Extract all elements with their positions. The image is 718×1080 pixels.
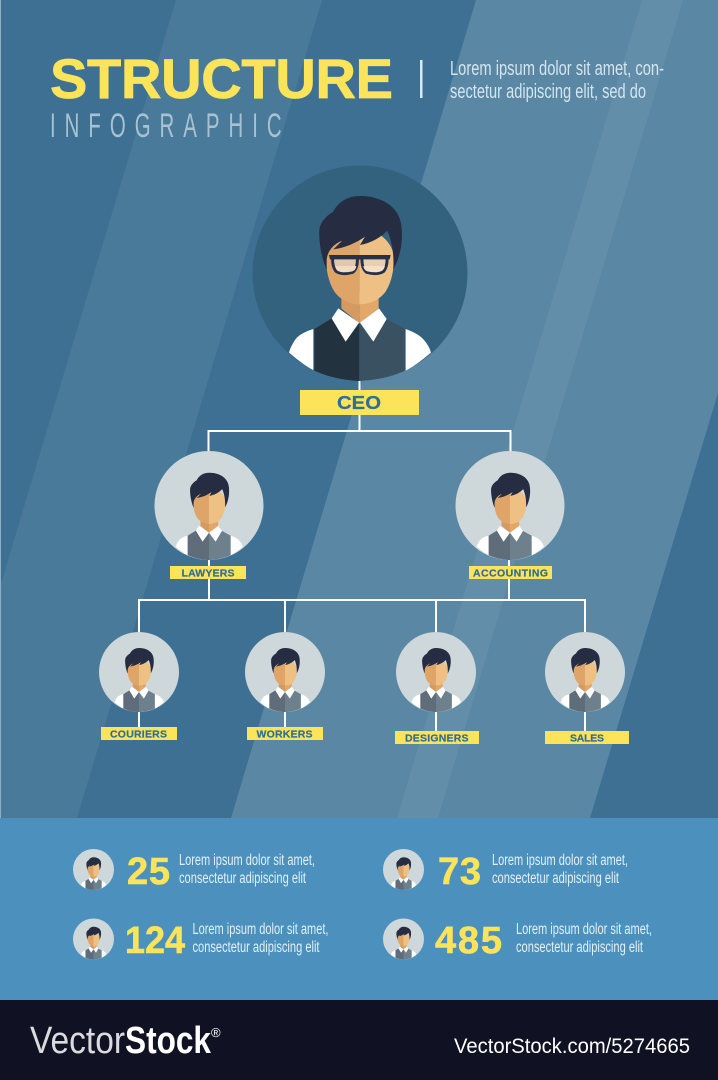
footer bar: [0, 1000, 718, 1080]
panel: statistics: [0, 818, 718, 1000]
label: lawyers: [170, 566, 246, 580]
avatar: sales: [545, 632, 625, 712]
label: lawyers: LAWYERS: [182, 568, 234, 580]
label: sales: SALES: [570, 732, 604, 744]
avatar: couriers: [99, 632, 179, 712]
background panel: [0, 0, 718, 818]
avatar: designers: [396, 632, 476, 712]
label: CEO: [300, 390, 419, 415]
label: workers: WORKERS: [256, 728, 312, 740]
left edge highlight: [0, 0, 1, 1000]
light beam right: [231, 0, 718, 818]
label: accounting: ACCOUNTING: [473, 568, 548, 580]
avatar: lawyers: [154, 451, 264, 560]
stat: 124: Lorem ipsum dolor sit amet,: [192, 921, 328, 938]
subtitle: INFOGRAPHIC: [50, 107, 282, 144]
label: designers: DESIGNERS: [405, 732, 468, 744]
light beam highlight: [397, 0, 683, 818]
avatar: workers: [245, 632, 325, 712]
label: couriers: COURIERS: [110, 728, 167, 740]
stat: 485: 485: [435, 920, 502, 962]
header description: sectetur adipiscing elit, sed do: [450, 81, 646, 103]
footer logo: [30, 1020, 221, 1062]
header description: [450, 58, 664, 103]
stat: 73: [383, 849, 628, 893]
stat: 124: 124: [125, 920, 185, 962]
stat: 485: consectetur adipiscing elit: [516, 939, 643, 956]
label: designers: [395, 731, 479, 744]
stat: 124: [73, 918, 328, 962]
footer logo: Stock: [125, 1020, 212, 1062]
footer image id: VectorStock.com/5274665: [454, 1035, 690, 1058]
header divider: [420, 60, 422, 98]
label: CEO: CEO: [337, 392, 381, 413]
CEO avatar: [252, 166, 468, 381]
stat: 73: 73: [438, 851, 481, 893]
stat: 124: consectetur adipiscing elit: [192, 939, 320, 956]
label: workers: [247, 727, 323, 740]
stat: 73: consectetur adipiscing elit: [492, 870, 619, 887]
org chart connector lines: [139, 378, 585, 732]
stat: 25: consectetur adipiscing elit: [179, 870, 306, 887]
label: sales: [545, 731, 629, 744]
stat: 485: Lorem ipsum dolor sit amet,: [516, 921, 652, 938]
title: STRUCTURE: [50, 47, 393, 110]
label: couriers: [101, 727, 177, 740]
light beam left: [0, 0, 322, 818]
stat: 485: [383, 918, 652, 962]
footer logo: ®: [211, 1025, 221, 1040]
stat: 25: 25: [127, 851, 170, 893]
stat: 73: Lorem ipsum dolor sit amet,: [492, 852, 628, 869]
footer logo: Vector: [30, 1020, 125, 1062]
avatar: accounting: [456, 451, 564, 560]
stat: 25: [73, 849, 315, 893]
stat: 25: Lorem ipsum dolor sit amet,: [179, 852, 315, 869]
